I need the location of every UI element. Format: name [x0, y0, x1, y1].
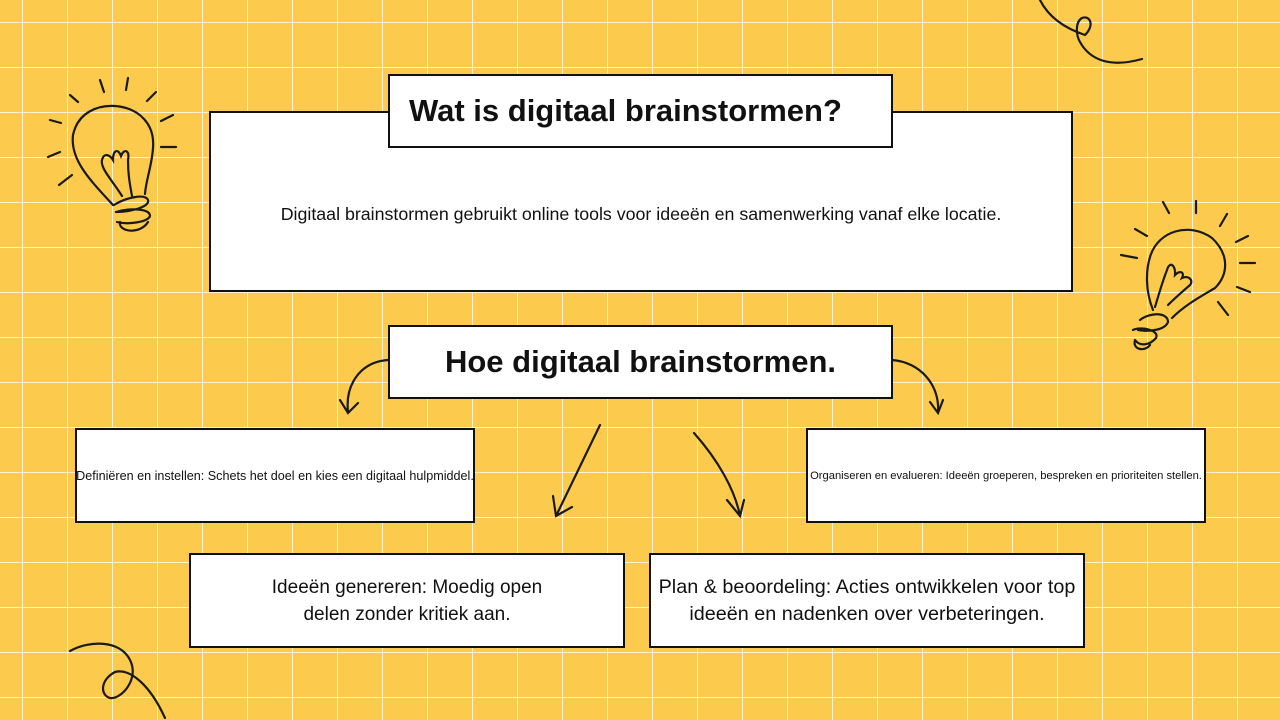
arrow: left curved	[340, 360, 388, 413]
step box: ideeën genereren: Ideeën genereren: Moedig open	[272, 576, 542, 598]
step box: organiseren	[806, 428, 1206, 523]
step box: plan & beoordeling: ideeën en nadenken over verbeteringen.	[689, 602, 1045, 624]
step box: definiëren: Definiëren en instellen: Schets het doel en kies een digitaal hulpmiddel.	[76, 468, 474, 482]
main description panel	[209, 111, 1073, 292]
subtitle heading: Hoe digitaal brainstormen.	[445, 344, 836, 379]
step box: organiseren: Organiseren en evalueren: Ideeën groeperen, bespreken en prioriteiten stellen.	[810, 470, 1202, 482]
arrow: center right	[694, 433, 744, 516]
step box: ideeën genereren: delen zonder kritiek aan.	[303, 604, 510, 624]
title: Wat is digitaal brainstormen?	[409, 93, 842, 128]
subtitle heading	[388, 325, 893, 399]
icon: squiggle top right	[1040, 0, 1142, 63]
arrow: right curved	[892, 360, 943, 413]
icon: squiggle bottom left	[70, 644, 165, 718]
title	[388, 74, 893, 148]
arrow: center left	[553, 425, 600, 516]
step box: plan & beoordeling	[649, 553, 1085, 648]
icon: lightbulb right	[1121, 201, 1255, 349]
main description panel: Digitaal brainstormen gebruikt online tools voor ideeën en samenwerking vanaf elke locatie.	[281, 204, 1001, 224]
step box: plan & beoordeling: Plan & beoordeling: Acties ontwikkelen voor top	[659, 576, 1075, 598]
icon: lightbulb left	[48, 78, 176, 231]
step box: ideeën genereren	[189, 553, 625, 648]
step box: definiëren	[75, 428, 475, 523]
